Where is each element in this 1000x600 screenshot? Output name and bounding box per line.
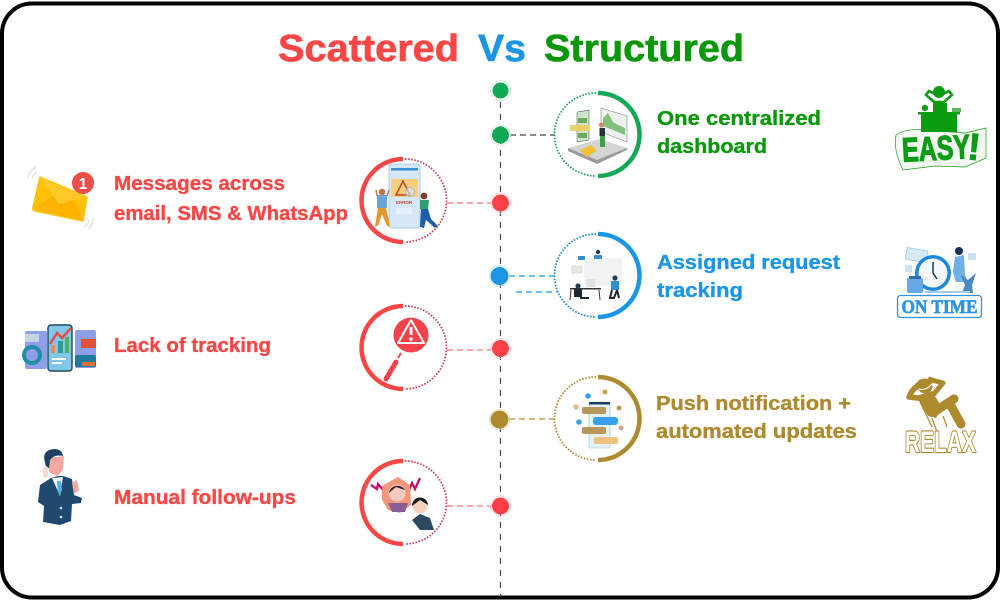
right label: assigned tracking: tracking [657,279,743,302]
connector: assigned tracking [509,276,558,292]
right label: centralized dashboard: One centralized [657,107,821,130]
right label: assigned tracking: Assigned request [657,251,840,274]
right label: centralized dashboard [657,107,821,158]
icon: analytics phone [24,325,96,371]
ring: push notification [554,377,640,460]
icon: easy badge: EASY [901,128,971,170]
title [278,28,744,70]
icon: businessman on phone [38,449,82,525]
icon: on time clock [898,247,982,318]
illustration: annoyed callers [371,477,434,530]
icon: envelope with badge [28,167,94,229]
connector: lack of tracking [447,349,491,351]
ring: assigned request tracking [554,234,640,317]
ring: messages problem [362,159,446,242]
icon: magnifier with warning [386,318,428,379]
right label: push notification [656,392,857,443]
title: Structured [544,28,744,70]
connector: manual follow-ups [447,505,491,507]
ring: lack of tracking problem [362,306,446,389]
right label: push notification: Push notification + [656,392,851,415]
left label: messages [114,172,348,225]
illustration: phone notifications [573,390,624,448]
ring: manual follow-ups problem [362,461,446,544]
connector: centralized dashboard [510,134,555,136]
connector: messages [447,202,491,204]
illustration: dashboard [568,108,627,164]
timeline nodes [489,80,510,516]
icon: on time clock: ON TIME [902,297,978,318]
ring: centralized dashboard [554,93,640,176]
right label: assigned tracking [657,251,840,302]
right label: centralized dashboard: dashboard [657,135,767,158]
left label: lack of tracking: Lack of tracking [114,334,271,357]
left label: manual follow-ups: Manual follow-ups [114,486,296,509]
illustration: error phone and two people: ERROR [396,200,413,205]
illustration: team at desk [570,250,622,300]
icon: envelope with badge: 1 [79,176,88,193]
connector: push notification [509,418,555,420]
icon: easy badge [895,86,986,170]
icon: relax figure [905,378,976,459]
left label: messages: email, SMS & WhatsApp [114,202,348,225]
title: Vs [478,28,526,70]
icon: easy badge: ! [966,126,983,169]
right label: push notification: automated updates [656,420,857,443]
central timeline [500,90,502,597]
title: Scattered [278,28,459,70]
left label: messages: Messages across [114,172,285,195]
